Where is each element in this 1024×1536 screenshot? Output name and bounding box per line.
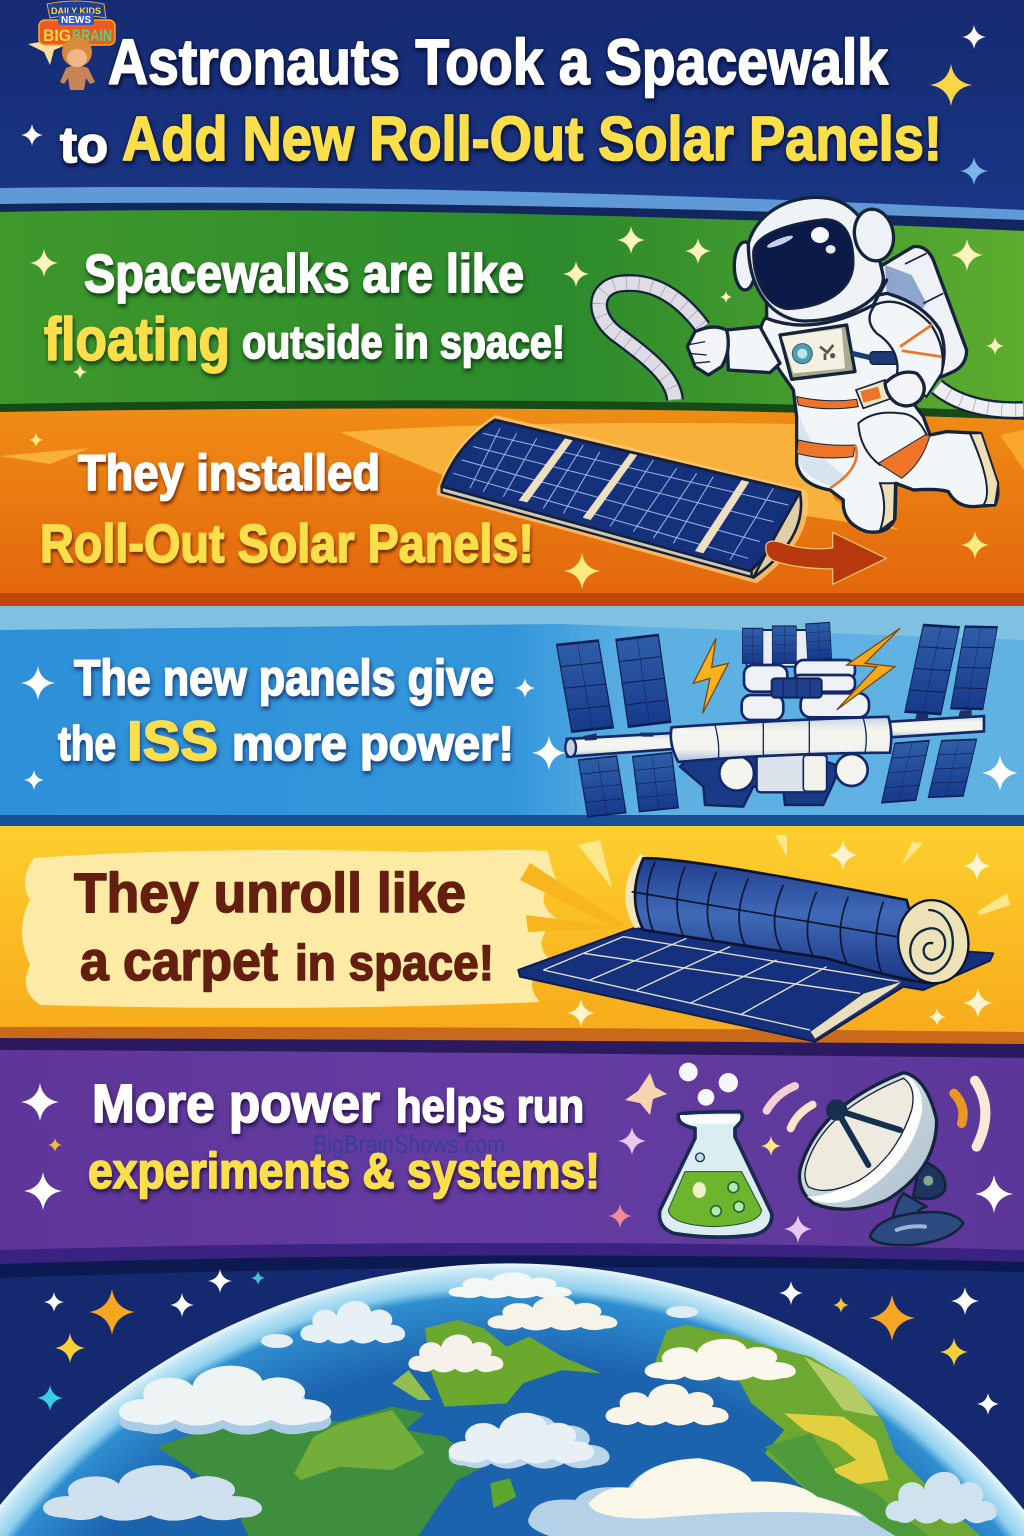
earth globe (0, 1263, 1024, 1536)
stripe: light blue under title (0, 187, 1024, 232)
icon: lightning right (837, 628, 900, 710)
tether left (599, 283, 703, 400)
panel: orange band (0, 408, 1024, 606)
panel: space with earth (0, 1243, 1024, 1536)
heading: they installed: They installed (78, 445, 380, 501)
panel: green spacewalk band (0, 210, 1024, 422)
solar arrays (557, 625, 997, 817)
heading: they unroll like: They unroll like (74, 861, 466, 924)
heading: more power: More power (92, 1074, 380, 1134)
icon: lightning left (693, 638, 728, 713)
under-body (680, 754, 868, 807)
logo: daily kids news big brain (28, 1, 115, 90)
text: floating: floating (44, 306, 230, 373)
orange suit stripes (755, 330, 858, 488)
logo: daily kids news big brain: BRAIN (72, 26, 112, 45)
icon: satellite dish (799, 1073, 963, 1245)
highlight blob behind text (22, 850, 558, 1008)
chest control panel (780, 325, 900, 379)
icon: signal arcs (767, 1081, 985, 1147)
text: the: the (58, 718, 116, 771)
icon: flask (659, 1063, 772, 1237)
text: a carpet: a carpet (80, 929, 278, 992)
heading: spacewalks line: Spacewalks are like (84, 244, 524, 304)
panel: yellow carpet band (0, 826, 1024, 1058)
left arm and glove (687, 327, 780, 375)
title background (0, 0, 1024, 330)
backpack (873, 246, 967, 383)
icon: international space station (557, 622, 997, 817)
logo: daily kids news big brain: NEWS (61, 14, 91, 26)
text: ISS: ISS (127, 709, 218, 772)
text: roll-out solar panels: Roll-Out Solar Panels! (40, 514, 534, 574)
text: in space: in space! (295, 935, 494, 991)
clouds (43, 1272, 997, 1536)
arrow: roll-out direction (766, 533, 885, 583)
stars on yellow band (567, 840, 993, 1027)
text: more power: more power! (232, 718, 514, 771)
text: helps run: helps run (396, 1080, 584, 1132)
stars in title (21, 25, 988, 185)
panel: purple experiments band (0, 1050, 1024, 1262)
logo: daily kids news big brain: BIG (43, 26, 71, 45)
heading: the new panels give: The new panels give (74, 650, 494, 706)
heading: title line one: Astronauts Took a Spacewalk (108, 26, 888, 98)
upper modules (742, 622, 869, 720)
stars on orange band (29, 433, 989, 589)
helmet (734, 197, 898, 325)
text: experiments and systems: experiments & systems! (88, 1143, 600, 1199)
land masses (157, 1320, 980, 1536)
suit body and legs (755, 293, 998, 532)
text: title to: to (60, 117, 108, 173)
logo: daily kids news big brain: DAILY KIDS (51, 6, 101, 17)
stars on green band (30, 226, 1004, 379)
panel: blue ISS band (0, 606, 1024, 826)
burst rays behind roll (520, 835, 1010, 932)
tether right (937, 387, 1023, 410)
main truss (565, 710, 984, 762)
icon: unrolling solar carpet (518, 854, 993, 1042)
icon: astronaut (599, 197, 1023, 532)
right arm and glove (856, 302, 943, 408)
icon: curved solar panel roll (437, 415, 808, 583)
stars on blue band (21, 666, 1018, 791)
watermark: BigBrainShows.com (313, 1129, 505, 1159)
stars around earth (37, 1269, 999, 1415)
text: outside in space: outside in space! (242, 316, 565, 368)
stars on purple band (21, 1073, 1013, 1243)
